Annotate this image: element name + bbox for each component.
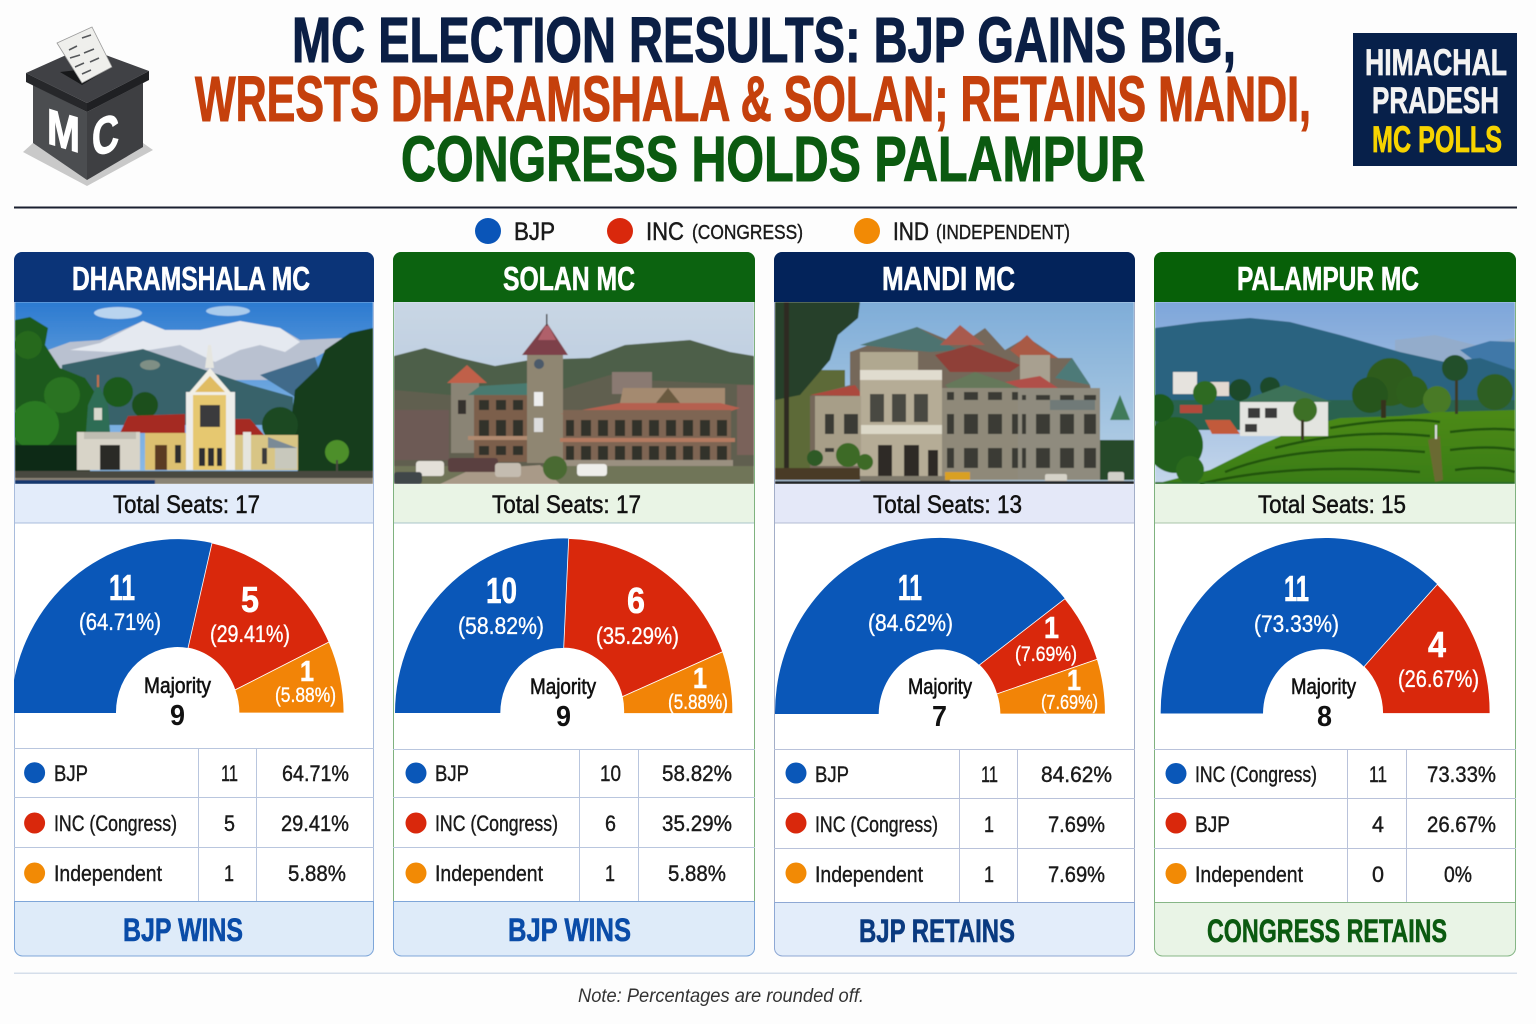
total seats: Dharamshala: Total Seats: 17 bbox=[113, 491, 260, 519]
chart: Mandi seat share semicircle: (84.62%) bbox=[868, 610, 953, 637]
table: Solan results: 5.88% bbox=[668, 861, 726, 886]
chart: Solan seat share semicircle: (35.29%) bbox=[596, 623, 679, 650]
icon: ballot box: C bbox=[92, 103, 119, 169]
chart: Palampur seat share semicircle: 11 bbox=[1284, 568, 1309, 609]
verdict: Congress retains, Palampur: CONGRESS RETAINS bbox=[1207, 913, 1447, 949]
table: Mandi results: 84.62% bbox=[1041, 762, 1112, 787]
legend: BJP bbox=[514, 218, 555, 246]
verdict: BJP wins, Dharamshala: BJP WINS bbox=[123, 912, 243, 948]
table: Mandi results: 7.69% bbox=[1048, 862, 1105, 887]
card header: Solan bbox=[393, 252, 755, 302]
total seats: Palampur: Total Seats: 15 bbox=[1258, 491, 1406, 519]
chart: Mandi seat share semicircle: 7 bbox=[932, 701, 947, 733]
chart: Solan seat share semicircle bbox=[395, 538, 733, 733]
table: Solan results: 1 bbox=[605, 861, 615, 886]
verdict: BJP wins, Dharamshala bbox=[14, 902, 374, 956]
table: Dharamshala results: INC (Congress) bbox=[54, 811, 177, 836]
table: Palampur results: 11 bbox=[1369, 762, 1387, 787]
total seats: Solan bbox=[394, 484, 754, 524]
badge: Himachal Pradesh MC Polls bbox=[1353, 33, 1517, 166]
photo: Solan clock tower building bbox=[394, 302, 754, 484]
table: Dharamshala results: 11 bbox=[221, 761, 238, 786]
table: Palampur results: Independent bbox=[1195, 862, 1303, 887]
table: Palampur results: 26.67% bbox=[1427, 812, 1496, 837]
table: Solan results: 35.29% bbox=[662, 811, 732, 836]
table: Mandi results: 11 bbox=[981, 762, 998, 787]
total seats: Palampur bbox=[1155, 484, 1515, 524]
card header: Dharamshala: DHARAMSHALA MC bbox=[72, 260, 310, 297]
chart: Solan seat share semicircle: Majority bbox=[530, 674, 596, 699]
chart: Solan seat share semicircle: (5.88%) bbox=[668, 691, 728, 714]
table: Solan results: Independent bbox=[435, 861, 543, 886]
table: Mandi results bbox=[774, 749, 1135, 902]
icon: ballot box bbox=[23, 27, 153, 186]
table: Dharamshala results: Independent bbox=[54, 861, 162, 886]
table: Solan results: 58.82% bbox=[662, 761, 732, 786]
verdict: BJP retains, Mandi: BJP RETAINS bbox=[859, 913, 1015, 949]
table: Mandi results: INC (Congress) bbox=[815, 812, 938, 837]
chart: Palampur seat share semicircle bbox=[1161, 538, 1490, 733]
total seats: Mandi bbox=[775, 484, 1134, 524]
verdict: BJP retains, Mandi bbox=[774, 902, 1134, 956]
table: Dharamshala results bbox=[14, 748, 374, 901]
table: Palampur results: 73.33% bbox=[1427, 762, 1496, 787]
total seats: Solan: Total Seats: 17 bbox=[492, 491, 641, 519]
chart: Palampur seat share semicircle: (73.33%) bbox=[1254, 611, 1339, 638]
verdict: Congress retains, Palampur bbox=[1154, 902, 1516, 956]
total seats: Dharamshala bbox=[15, 484, 373, 524]
legend bbox=[475, 218, 1070, 246]
total seats: Mandi: Total Seats: 13 bbox=[873, 491, 1022, 519]
chart: Dharamshala seat share semicircle: 11 bbox=[109, 567, 135, 608]
table: Dharamshala results: 5 bbox=[224, 811, 235, 836]
chart: Solan seat share semicircle: (58.82%) bbox=[458, 613, 544, 640]
chart: Mandi seat share semicircle: 1 bbox=[1067, 665, 1081, 697]
table: Dharamshala results: 64.71% bbox=[282, 761, 349, 786]
table: Dharamshala results: 29.41% bbox=[281, 811, 349, 836]
table: Solan results: BJP bbox=[435, 761, 469, 786]
photo: Mandi heritage building bbox=[775, 302, 1134, 484]
card header: Solan: SOLAN MC bbox=[503, 260, 635, 297]
title bbox=[195, 4, 1311, 195]
panel: Palampur MC bbox=[1146, 252, 1516, 956]
card header: Palampur bbox=[1154, 252, 1516, 302]
chart: Palampur seat share semicircle: Majority bbox=[1291, 674, 1356, 699]
chart: Palampur seat share semicircle: (26.67%) bbox=[1398, 666, 1479, 693]
legend: (INDEPENDENT) bbox=[936, 222, 1070, 244]
chart: Palampur seat share semicircle: 4 bbox=[1428, 624, 1446, 665]
table: Mandi results: 7.69% bbox=[1048, 812, 1105, 837]
photo: Palampur tea gardens and hills bbox=[1146, 302, 1515, 484]
panel: Dharamshala MC bbox=[11, 252, 374, 956]
chart: Mandi seat share semicircle: (7.69%) bbox=[1041, 692, 1098, 714]
chart: Palampur seat share semicircle: 8 bbox=[1317, 701, 1332, 733]
table: Palampur results: INC (Congress) bbox=[1195, 762, 1317, 787]
table: Mandi results: 1 bbox=[984, 862, 994, 887]
table: Dharamshala results: 1 bbox=[224, 861, 234, 886]
chart: Solan seat share semicircle: 9 bbox=[556, 701, 571, 733]
table: Dharamshala results: 5.88% bbox=[288, 861, 346, 886]
chart: Dharamshala seat share semicircle: (5.88%) bbox=[275, 684, 336, 707]
chart: Mandi seat share semicircle: 11 bbox=[898, 567, 922, 608]
panel: Solan MC bbox=[393, 252, 755, 956]
table: Palampur results: BJP bbox=[1195, 812, 1230, 837]
verdict: BJP wins, Solan: BJP WINS bbox=[508, 912, 631, 948]
chart: Dharamshala seat share semicircle: 9 bbox=[170, 700, 185, 732]
chart: Solan seat share semicircle: 1 bbox=[693, 663, 707, 695]
photo: Dharamshala building and mountains bbox=[11, 302, 373, 484]
panel: Mandi MC bbox=[774, 252, 1135, 956]
legend: IND bbox=[893, 218, 929, 246]
table: Palampur results: 4 bbox=[1372, 812, 1384, 837]
chart: Dharamshala seat share semicircle: 5 bbox=[241, 579, 259, 620]
chart: Mandi seat share semicircle: 1 bbox=[1044, 610, 1059, 645]
chart: Mandi seat share semicircle: Majority bbox=[908, 674, 972, 699]
legend: (CONGRESS) bbox=[692, 222, 803, 244]
table: Solan results: 6 bbox=[605, 811, 616, 836]
table: Solan results bbox=[393, 749, 755, 901]
footnote: Note: Percentages are rounded off. bbox=[578, 986, 864, 1007]
card header: Mandi bbox=[774, 252, 1135, 302]
table: Palampur results bbox=[1154, 749, 1516, 902]
card header: Mandi: MANDI MC bbox=[882, 260, 1015, 297]
chart: Dharamshala seat share semicircle: (29.41%) bbox=[210, 621, 290, 648]
chart: Dharamshala seat share semicircle: Majority bbox=[144, 673, 211, 698]
verdict: BJP wins, Solan bbox=[394, 902, 754, 956]
table: Palampur results: 0 bbox=[1372, 862, 1384, 887]
card header: Dharamshala bbox=[14, 252, 374, 302]
table: Solan results: 10 bbox=[600, 761, 621, 786]
table: Mandi results: BJP bbox=[815, 762, 849, 787]
chart: Mandi seat share semicircle bbox=[775, 538, 1105, 733]
chart: Solan seat share semicircle: 10 bbox=[486, 570, 517, 611]
chart: Dharamshala seat share semicircle: 1 bbox=[300, 656, 314, 688]
table: Mandi results: 1 bbox=[984, 812, 994, 837]
table: Dharamshala results: BJP bbox=[54, 761, 88, 786]
chart: Dharamshala seat share semicircle bbox=[14, 539, 344, 732]
legend: INC bbox=[646, 218, 684, 246]
table: Solan results: INC (Congress) bbox=[435, 811, 558, 836]
icon: ballot box: M bbox=[47, 98, 80, 164]
card header: Palampur: PALAMPUR MC bbox=[1237, 260, 1419, 297]
table: Mandi results: Independent bbox=[815, 862, 923, 887]
chart: Dharamshala seat share semicircle: (64.71%) bbox=[79, 609, 161, 636]
chart: Mandi seat share semicircle: (7.69%) bbox=[1015, 643, 1077, 666]
title: CONGRESS HOLDS PALAMPUR bbox=[401, 123, 1145, 195]
chart: Solan seat share semicircle: 6 bbox=[627, 580, 645, 621]
table: Palampur results: 0% bbox=[1444, 862, 1472, 887]
